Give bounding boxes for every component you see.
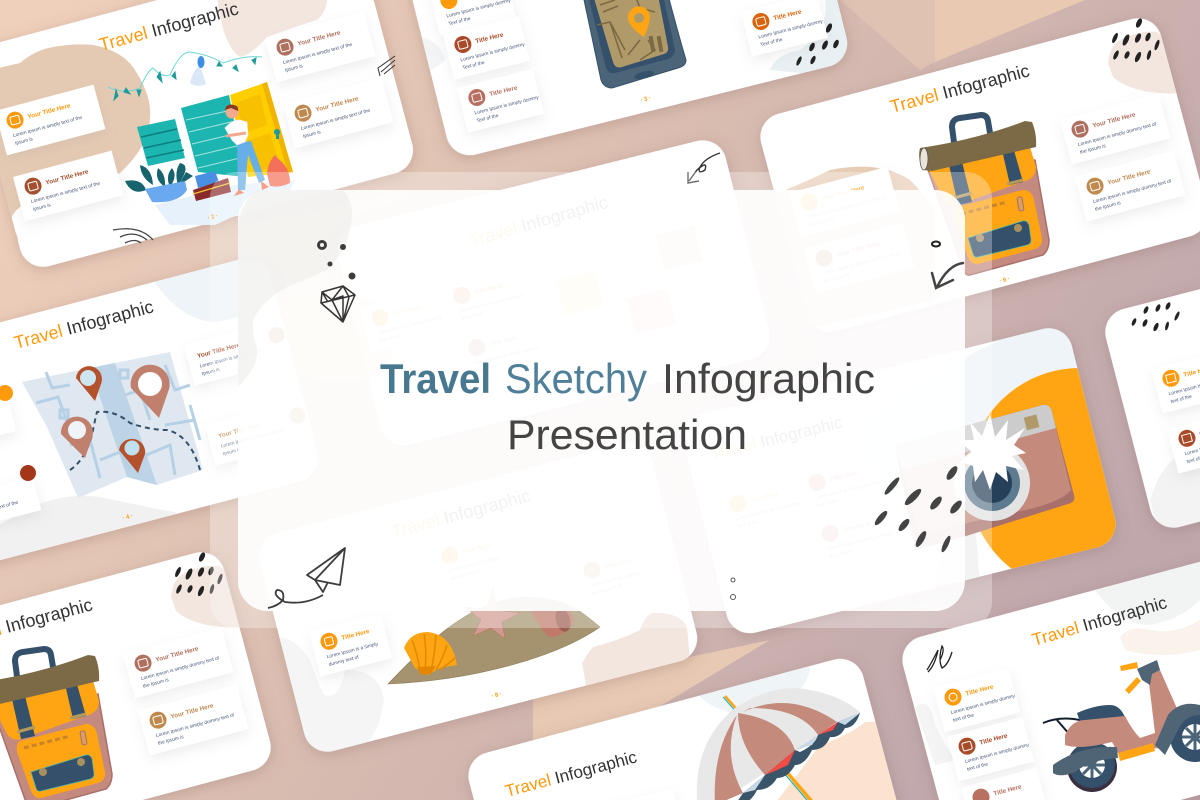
illustration: suitcases [193, 171, 231, 201]
card [804, 223, 914, 293]
card: Text of the [448, 16, 472, 27]
title: Travel Sketchy Infographic Presentation: Presentation [507, 411, 747, 458]
card: Lorem Ipsum is simply dummy [377, 314, 443, 336]
title: Travel Infographic [12, 296, 156, 353]
card: text of the [816, 498, 838, 509]
card: Title Here [829, 469, 859, 483]
card: Lorem Ipsum is simply dummy text of [821, 250, 901, 277]
card [13, 151, 123, 221]
sketch: drops [795, 22, 840, 66]
card [138, 685, 248, 755]
illustration: starfish [465, 588, 520, 639]
illustration: scallop shell [404, 632, 457, 675]
card [0, 477, 41, 536]
card: Ipsum is [222, 447, 242, 457]
card [205, 399, 314, 466]
panel: slide 6 backpack [758, 18, 1200, 300]
card: Lorem Ipsum is simply dummy [964, 742, 1030, 765]
card: Title Here [474, 282, 504, 296]
card: Title Here [993, 783, 1023, 798]
panel: scooter slide [901, 562, 1200, 800]
illustration: backpack [0, 649, 112, 800]
illustration: sticky notes [551, 225, 716, 349]
sketch: fan [378, 56, 395, 76]
card: Title Here [489, 84, 519, 98]
card: Lorem Ipsum is simply dummy [814, 479, 880, 501]
panel: slide 4 far right [1104, 289, 1200, 532]
card: Lorem Ipsum is simply dummy text of [1092, 178, 1172, 205]
card [360, 289, 447, 353]
pagination: · 8 · [491, 691, 503, 700]
card: Lorem Ipsum is simply dummy [758, 18, 824, 40]
card: Lorem Ipsum is simply text of the [300, 108, 371, 132]
panel: slide 3 phone [398, 0, 870, 160]
card [430, 527, 513, 591]
card [947, 717, 1034, 781]
card [457, 69, 544, 133]
card: Your Title Here [821, 184, 866, 203]
card [309, 613, 392, 677]
title: Travel Infographic [888, 60, 1032, 117]
card: Title Here [392, 304, 422, 318]
illustration: conch shell [530, 607, 574, 637]
card [429, 0, 516, 36]
illustration: plant in pot [125, 163, 193, 202]
card: Lorem Ipsum is simply text of the [30, 181, 101, 205]
card: the Ipsum is [1079, 143, 1107, 156]
card [1060, 94, 1170, 164]
panel: beach slide [271, 491, 700, 757]
pagination: · 6 · [999, 276, 1011, 285]
title: Travel Infographic [467, 192, 610, 251]
card: Your Title Here [836, 240, 881, 259]
panel: slide 2 room [0, 0, 418, 272]
card: Lorem Ipsum is simply dummy text of [1077, 121, 1157, 148]
illustration: scooter [1043, 660, 1200, 792]
pagination: · 4 · [122, 513, 134, 522]
card: Title Here [979, 732, 1009, 747]
card [184, 319, 293, 386]
illustration: leaf garland and lamp [108, 52, 262, 100]
card: Your Title Here [1092, 111, 1137, 130]
card: Lorem Ipsum is simply dummy [474, 344, 540, 366]
card: text of the [737, 519, 759, 530]
icon: white burst [958, 414, 1026, 490]
overlay: inner card [238, 190, 965, 611]
card: Ipsum is [32, 202, 52, 213]
illustration: camera [895, 405, 1074, 550]
card [265, 12, 375, 82]
illustration: teal shelves [137, 95, 245, 177]
card [1151, 349, 1200, 414]
sketch: ring [932, 242, 940, 246]
card: Lorem Ipsum is simply dummy [220, 427, 286, 450]
card [0, 85, 105, 155]
sketch: small rings [730, 578, 736, 600]
card: Lorem Ipsum is a simply [447, 555, 500, 574]
sketch: dots [318, 242, 356, 280]
card [123, 628, 233, 698]
title: Travel Infographic [97, 0, 241, 55]
card: Your Title Here [45, 168, 90, 187]
card [443, 16, 530, 80]
card: Lorem Ipsum is simply dummy [460, 41, 526, 63]
card: Your Title Here [217, 422, 262, 440]
card [718, 475, 805, 539]
icon [20, 465, 36, 481]
icon [0, 385, 13, 401]
icon: diamond [321, 286, 355, 322]
overlay blob [238, 190, 352, 387]
title: Travel Infographic [1030, 592, 1169, 650]
card: text of the [476, 363, 498, 374]
card: Title Here [489, 334, 519, 348]
sketch: squiggle [927, 646, 952, 672]
card: dummy text of [328, 654, 360, 668]
title: Travel Infographic [389, 485, 533, 542]
illustration: backpack [267, 155, 290, 187]
card [797, 454, 884, 518]
card: text of the [966, 761, 989, 773]
card [576, 788, 684, 800]
chart: map with pins [22, 352, 203, 498]
card: Lorem Ipsum is simply dummy [827, 530, 893, 552]
title: Travel Sketchy Infographic Presentation: Infographic [662, 355, 875, 402]
card [741, 0, 828, 57]
card: Title Here [750, 490, 780, 504]
sketch: rain drops [873, 464, 964, 553]
card: Lorem Ipsum is simply text of the [12, 115, 83, 139]
card: Title Here [773, 8, 803, 22]
card [961, 768, 1048, 800]
title: Travel Infographic [503, 747, 639, 800]
illustration: surfboard [388, 597, 600, 684]
panel: camera slide [714, 328, 1118, 638]
card: Your Title Here [1107, 168, 1152, 187]
panel: map slide [0, 260, 284, 568]
card: dummy text of [449, 568, 481, 582]
card: Lorem Ipsum is a simply [589, 570, 642, 589]
card: text of the [379, 333, 401, 344]
card [572, 542, 655, 606]
panel: umbrella slide [466, 658, 900, 800]
card [442, 267, 529, 331]
pagination: · 3 · [640, 96, 652, 104]
title: Travel Sketchy Infographic Presentation: Travel [380, 355, 491, 402]
card: Ipsum is [201, 367, 221, 377]
illustration: yellow door [230, 82, 293, 177]
card: Your Title Here [170, 702, 215, 721]
card: Lorem Ipsum is simply dummy [735, 500, 801, 522]
card: Lorem Ipsum is a simply [326, 641, 379, 660]
card: text of the [952, 712, 975, 724]
card: Your Title Here [27, 102, 72, 121]
card [1075, 151, 1185, 221]
overlay: outer translucent panel [210, 172, 992, 628]
card: the Ipsum is [142, 677, 170, 690]
illustration: phone with map pin [583, 0, 686, 88]
card: text of the [1170, 394, 1193, 405]
illustration: traveller [225, 105, 269, 196]
card: Your Title Here [196, 342, 241, 360]
card: Your Title Here [297, 29, 342, 48]
card: the Ipsum is [823, 272, 851, 285]
card: Your Title Here [155, 645, 200, 664]
card: Title Here [604, 557, 634, 571]
card: text of the [461, 311, 483, 322]
card: the Ipsum is [808, 216, 836, 229]
card: Title Here [462, 542, 492, 556]
title: Travel Sketchy Infographic Presentation: Sketchy [505, 355, 647, 402]
card: Lorem Ipsum is simply dummy [474, 94, 540, 116]
sketch: arrow [688, 153, 720, 183]
card: Ipsum is [302, 129, 322, 140]
card: the Ipsum is [1094, 200, 1122, 213]
card: Lorem Ipsum is simply dummy text of [806, 194, 886, 221]
card: Text of the [476, 113, 500, 124]
card: Text of the [462, 60, 486, 71]
card: Title Here [341, 628, 371, 642]
card: Lorem Ipsum is simply text of the [282, 42, 353, 66]
card: Text of the [760, 37, 784, 48]
card: Lorem Ipsum is simply dummy [459, 292, 525, 314]
card: Title Here [965, 683, 995, 698]
card: Title Here [842, 520, 872, 534]
card [283, 78, 393, 148]
card: dummy text of [591, 583, 623, 597]
card: Lorem Ipsum is simply dummy [950, 693, 1016, 716]
card: Title Here [475, 31, 505, 45]
sketch: arcs [113, 229, 153, 243]
card [0, 398, 16, 457]
card: Your Title Here [315, 95, 360, 114]
card: the Ipsum is [157, 734, 185, 747]
panel: backpack slide (lower left) [0, 547, 276, 800]
illustration: beach umbrella [697, 688, 861, 800]
arrow [932, 263, 963, 288]
pagination: · 2 · [207, 213, 219, 222]
sketch: drops [174, 551, 224, 597]
card: Lorem Ipsum is simply dummy text of [155, 712, 235, 739]
card [1167, 409, 1200, 474]
sketch: drops [1131, 302, 1181, 332]
title: Travel Infographic [708, 413, 845, 464]
card: text of the [829, 549, 851, 560]
card [933, 668, 1020, 732]
illustration: reflection [155, 180, 295, 225]
card [457, 319, 544, 383]
card: Lorem Ipsum is simply dummy [199, 347, 265, 370]
panel: slide with sticky notes (under overlay) [267, 135, 775, 450]
card: Ipsum is [284, 63, 304, 74]
card [789, 167, 899, 237]
blob [267, 293, 395, 380]
sketch: drops [1111, 17, 1161, 63]
illustration: backpack [919, 115, 1049, 275]
card: Lorem Ipsum is simply dummy text of [140, 655, 220, 682]
sketch: paper plane [268, 548, 345, 608]
card [810, 505, 897, 569]
title: Travel Sketchy Infographic Presentation [380, 355, 875, 458]
card: Ipsum is [14, 136, 34, 147]
